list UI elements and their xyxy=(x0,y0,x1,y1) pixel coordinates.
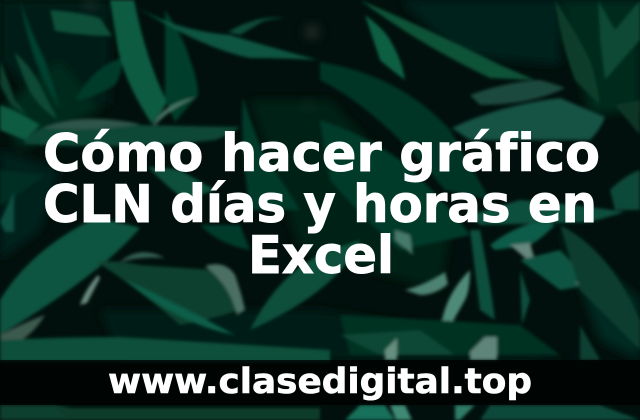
title xyxy=(43,124,600,286)
leaf: bottom strip xyxy=(0,405,140,420)
leaf: right pale horizontals xyxy=(470,80,565,105)
leaf: top-left band xyxy=(50,10,112,36)
title: Cómo hacer gráfico xyxy=(43,124,600,184)
leaf: left upper small xyxy=(0,170,45,205)
leaf: upper-centre bright xyxy=(360,0,535,80)
leaf: far right verticals xyxy=(555,0,600,105)
leaf: horizontal under title xyxy=(25,119,240,146)
title: Excel xyxy=(248,226,394,286)
leaf: central lower curling xyxy=(97,261,240,325)
leaf: small pale curl xyxy=(152,97,197,130)
leaf: large lower left xyxy=(0,218,140,335)
leaf: long arc at top xyxy=(125,0,318,60)
leaf: centre-lower Excel side xyxy=(250,240,360,330)
website url: www.clasedigital.top xyxy=(108,362,532,402)
grey bokeh highlights xyxy=(83,1,320,109)
leaf: upper-left blades xyxy=(20,0,60,110)
url band xyxy=(0,360,640,405)
leaf: lower horizontal bands xyxy=(340,315,560,355)
title: CLN días y horas en xyxy=(43,175,597,235)
leaf: right cluster pale xyxy=(405,272,448,295)
leaf: bright vertical xyxy=(110,0,167,124)
leaf: centre dark large xyxy=(242,97,300,210)
